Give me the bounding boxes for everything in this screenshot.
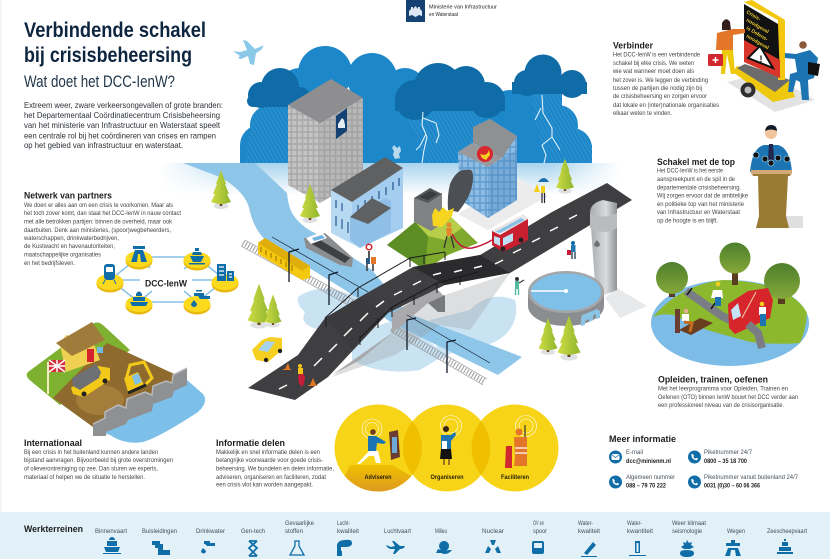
labels: Gevaarlijke [285, 520, 314, 527]
icon: phone [609, 476, 622, 488]
trees [656, 242, 800, 304]
node: sea shipping [184, 248, 210, 270]
text: Internationaal: materiaal of helpen we de situatie te herstellen. [24, 474, 145, 481]
icon: inland shipping [103, 537, 121, 554]
text: Verbinder: elkaar weten te vinden. [613, 110, 672, 117]
general number text: Algemeen nummer [626, 474, 675, 481]
brown land [53, 343, 183, 427]
labels: kwaliteit [337, 528, 359, 535]
text: Internationaal: of olieverontreiniging op zee. Dan sturen we experts, [24, 466, 158, 473]
contact: Meer informatie: Meer informatie [609, 434, 676, 445]
microphones [753, 152, 790, 166]
labels: Nuclear [482, 528, 504, 535]
circle labels: Adviseren [364, 474, 392, 481]
labels [95, 520, 807, 535]
ministry logo: en Waterstaat [429, 12, 458, 18]
labels: stoffen [285, 528, 303, 535]
labels: Water- [627, 520, 642, 527]
node: roads [126, 246, 152, 270]
workers [711, 282, 723, 306]
email text: dcc@minienm.nl [626, 458, 671, 465]
text: Schakel met de top [657, 157, 748, 225]
intro text: op het gebied van infrastructuur en waterstaat. [24, 140, 183, 150]
labels: spoor [533, 528, 547, 535]
sign text: noodgeval [745, 18, 770, 36]
text: Schakel met de top: van Infrastructuur en Waterstaat [657, 209, 740, 216]
text: Internationaal: Internationaal [24, 438, 82, 449]
people on the road [283, 178, 576, 387]
people at sign [366, 244, 376, 271]
footer band: Werkterreinen: Werkterreinen [24, 524, 83, 535]
water tower [590, 200, 647, 318]
tree [556, 159, 574, 194]
light blue building [331, 145, 403, 248]
blue office tower [458, 119, 517, 218]
intro text: Extreem weer, zware verkeersongevallen of grote branden: [24, 100, 223, 110]
text: Schakel met de top: Wij zorgen ervoor dat de ambtelijke [657, 193, 748, 200]
house [56, 322, 105, 372]
general number text [626, 474, 675, 490]
icon: airplane [233, 40, 263, 65]
text: Internationaal: bijstand aanvragen. Bijvoorbeeld bij grote overstromingen [24, 457, 173, 464]
road shadow on river [332, 273, 510, 377]
text: Schakel met de top: en politieke top van het ministerie [657, 201, 744, 208]
labels: Luchtvaart [384, 528, 411, 535]
road worker [298, 364, 305, 387]
labels: Milieu [435, 528, 447, 535]
text: Netwerk van partners: het toch zover komt, dan staat het DCC-IenW in nauw contact [24, 210, 181, 217]
dark cloud right [512, 54, 587, 98]
tree [558, 316, 580, 360]
labels: Wegen [727, 528, 745, 535]
green land [27, 322, 130, 405]
text: Informatie delen: Makkelijk en snel informatie delen is een [216, 449, 320, 456]
contact: Meer informatie [609, 434, 798, 490]
labels: kwaliteit [578, 528, 600, 535]
dark cloud middle [395, 63, 505, 120]
intro text: het Departementaal Coördinatiecentrum Crisisbeheersing [24, 110, 220, 120]
text: Opleiden, trainen, oefenen: een professioneel niveau van de crisisorganisatie. [658, 402, 784, 409]
man in blue suit [785, 41, 820, 100]
bridge railings [325, 252, 478, 345]
text: Verbinder: schakel bij elke crisis. We weten [613, 60, 694, 67]
round water basin [528, 271, 604, 326]
tanker truck [71, 364, 110, 397]
icon: water quality [581, 542, 597, 557]
firefighter and hose [444, 222, 492, 248]
text: Verbinder: dat lokale en (inter)nationale organisaties [613, 102, 719, 109]
podium [751, 171, 792, 228]
figure: organiser [440, 416, 462, 465]
text: Netwerk van partners: de Kustwacht en havenautoriteiten, [24, 243, 115, 250]
illustration: Internationaal [27, 322, 205, 443]
icon: weather, climate, seismology [680, 540, 694, 557]
labels: Drinkwater [196, 528, 225, 535]
tree [211, 170, 231, 209]
logo flame [477, 146, 493, 162]
text: Verbinder: Het DCC-IenW is een verbindende [613, 52, 700, 59]
abroad number text: Piketnummer vanuit buitenland 24/7 [704, 474, 798, 481]
sign text: noodgeval [745, 34, 770, 52]
icon: drinking water [201, 541, 215, 554]
river under bridge [392, 313, 522, 375]
labels: Gen-tech [241, 528, 265, 535]
subtitle: Wat doet het DCC-IenW? [24, 73, 175, 91]
icon: pipelines [152, 541, 170, 555]
icon: gen-tech [249, 541, 257, 556]
text: Schakel met de top: aanspreekpunt en de spil in de [657, 176, 735, 183]
icon: public transport and rail [532, 541, 544, 554]
icon: water quantity [629, 541, 646, 556]
title [24, 18, 206, 67]
icon: roads [725, 540, 741, 556]
text: Informatie delen: beheersing. We bundelen en delen informatie, [216, 466, 334, 473]
yellow car [252, 337, 282, 362]
text: Opleiden, trainen, oefenen: Opleiden, trainen, oefenen [658, 375, 768, 386]
node: rail [96, 264, 124, 292]
text: Verbinder: tussen de partijen die nodig zijn bij [613, 85, 702, 92]
labels: OV en [533, 520, 544, 527]
red van [728, 288, 773, 334]
text: Informatie delen: een crisis vlot kan worden aangepakt. [216, 482, 313, 489]
storm clouds [240, 46, 608, 168]
dark cloud left [247, 68, 310, 108]
excavator [124, 362, 152, 393]
ground [160, 163, 620, 230]
tree [300, 184, 320, 223]
sign text: is Defens- [745, 26, 769, 43]
smoke plume [448, 170, 473, 212]
email text: E-mail [626, 449, 643, 456]
abroad number text: 0031 (0)30 – 60 06 366 [704, 482, 760, 490]
text: Verbinder: het zover is. We leggen de verbinding [613, 77, 708, 84]
man with suitcase [567, 241, 576, 259]
green hill with fire [387, 170, 492, 270]
text: Netwerk van partners: en het bedrijfsleven. [24, 260, 75, 267]
icon: phone [688, 450, 701, 464]
flag [47, 360, 65, 394]
icon: phone [688, 476, 701, 488]
tree [538, 318, 558, 355]
icon: email [609, 450, 622, 464]
lane markings [264, 215, 577, 399]
text: Internationaal: Bij een crisis in het buitenland kunnen andere landen [24, 449, 158, 456]
text: Verbinder: Verbinder [613, 40, 653, 52]
labels: Binnenvaart [95, 528, 127, 535]
tree [248, 284, 270, 328]
icon: air quality [337, 540, 352, 556]
rain hatching [244, 94, 608, 163]
text: Schakel met de top: departementale crisisbeheersing. [657, 184, 741, 192]
flames [432, 207, 454, 227]
node: buildings [212, 264, 238, 292]
circle labels [364, 474, 529, 481]
email text [626, 449, 671, 465]
labels: Weer klimaat [672, 520, 706, 527]
text: Schakel met de top: Het DCC-IenW is het eerste [657, 168, 723, 175]
big blue cloud [240, 46, 592, 168]
logo banner on tower [336, 108, 347, 139]
text: Opleiden, trainen, oefenen: Met het leerprogramma voor Opleiden, Trainen en [658, 386, 788, 393]
trailer [733, 66, 795, 102]
text: Informatie delen: Informatie delen [216, 438, 285, 449]
phone text [704, 449, 752, 465]
sector icons [103, 537, 793, 557]
text: Netwerk van partners [23, 190, 181, 267]
figure: advisor [357, 419, 400, 464]
text: Verbinder: wie wat wanneer moet doen als [612, 68, 694, 75]
tree [264, 294, 282, 328]
labels: Zeescheepvaart [767, 528, 807, 535]
pipe [686, 291, 730, 320]
labels: Buisleidingen [142, 528, 177, 535]
river [183, 163, 522, 375]
text: Verbinder [612, 40, 719, 117]
general number text: 088 – 79 70 222 [626, 482, 666, 490]
text: Informatie delen [216, 438, 334, 489]
abroad number text [704, 474, 798, 490]
illustration: Verbinder trailer [708, 0, 820, 112]
lightning bolts [416, 95, 560, 163]
title: bij crisisbeheersing [24, 43, 192, 67]
road and bridge [248, 183, 632, 400]
traffic cone [308, 378, 317, 386]
text: Netwerk van partners: maatschappelijke organisaties [24, 252, 101, 258]
phone text: Piketnummer 24/7 [704, 449, 752, 456]
yellow train [258, 238, 310, 280]
text: Opleiden, trainen, oefenen: Oefenen (OTO) binnen IenW bouwt het DCC verder aan [658, 394, 798, 401]
icon: environment [436, 541, 452, 554]
catenary poles [272, 237, 490, 373]
text: Verbinder: de crisisbeheersing en zorgen ervoor [613, 93, 708, 100]
person in green [515, 277, 524, 295]
text: Netwerk van partners: Netwerk van partners [24, 190, 112, 202]
worker with stretcher [675, 309, 713, 335]
labels: seismologie [672, 528, 702, 535]
illustration: speaker at podium [750, 125, 803, 228]
text: Netwerk van partners: met alle betrokken partijen: binnen de overheid, maar ook [24, 218, 173, 226]
sheet pile wall [93, 368, 187, 436]
sign text [745, 10, 770, 52]
label: DCC-IenW [145, 278, 187, 290]
woman with first aid kit [708, 19, 745, 74]
ship [304, 232, 353, 267]
text: Opleiden, trainen, oefenen [658, 375, 798, 409]
intro text: van het ministerie van Infrastructuur en Waterstaat speelt [24, 120, 221, 130]
intro text: een centrale rol bij het coördineren van crises en rampen [24, 130, 216, 140]
water [100, 380, 205, 443]
traffic cone [283, 363, 291, 370]
icon: sea shipping [777, 539, 793, 554]
phone text: 0800 – 35 18 700 [704, 458, 747, 465]
illustration: training island [651, 242, 809, 366]
chimney block [414, 188, 442, 231]
title: Verbindende schakel [24, 18, 206, 42]
railway track [241, 240, 487, 385]
labels: Water- [578, 520, 593, 527]
text: Netwerk van partners: We doen er alles aan om een crisis te voorkomen. Maar als [24, 202, 173, 209]
labels: Lucht- [337, 520, 350, 527]
ministry logo: Ministerie van Infrastructuur [429, 4, 497, 10]
sign board [744, 0, 785, 80]
text: Informatie delen: adviseren, organiseren en faciliteren, zodat [216, 474, 326, 481]
grey tower building [288, 79, 363, 203]
text: Internationaal [24, 438, 173, 481]
circle labels: Faciliteren [501, 474, 529, 481]
text: Schakel met de top: Schakel met de top [657, 157, 735, 168]
figure: firefighter with hydrant [505, 416, 536, 468]
intro text [24, 100, 223, 150]
node: drinking water [184, 290, 210, 314]
circle labels: Organiseren [430, 474, 464, 481]
icon: hazardous substances [290, 541, 304, 555]
text: Netwerk van partners: daarbuiten. Denk aan ministeries, (spoor)wegbeheerders, [24, 227, 171, 234]
icon: aviation [386, 541, 405, 554]
footer band: Werkterreinen [0, 512, 830, 559]
sign text: Crisis- [745, 10, 762, 23]
text: Informatie delen: belangrijke voorwaarde voor goede crisis- [216, 457, 323, 464]
ministry logo [406, 0, 497, 22]
node: inland shipping [126, 292, 152, 314]
text: Schakel met de top: op de hoogte is en blijft. [657, 218, 718, 225]
icon: nuclear [485, 540, 501, 553]
text: Netwerk van partners: waterschappen, drinkwaterbedrijven, [23, 235, 119, 242]
flood water [298, 289, 516, 372]
diagram: DCC-IenW network [96, 246, 238, 314]
venn diagram: Adviseren, Organiseren, Faciliteren [334, 404, 558, 492]
person with umbrella [534, 178, 549, 203]
fire truck [492, 215, 528, 252]
labels: kwantiteit [627, 528, 653, 535]
illustration: Verbinder trailer: ! [760, 54, 762, 64]
